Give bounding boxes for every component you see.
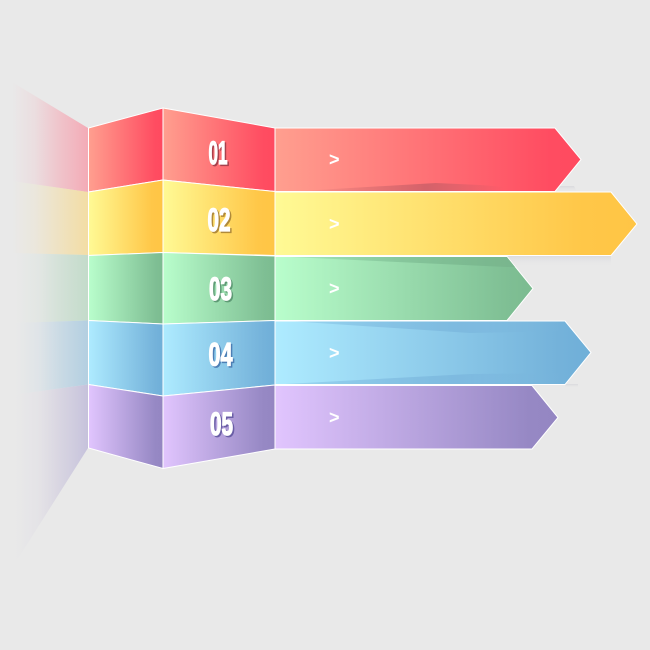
panel: faded left wall [12, 82, 88, 568]
step 05 number [210, 406, 234, 444]
left fold panel 01 [88, 108, 163, 192]
left fold panel 05 [88, 384, 163, 468]
right fold panel 03 [163, 252, 275, 324]
left fold panel 02 [88, 180, 163, 256]
arrow 01 [275, 128, 581, 192]
step 05 chevron: > [329, 408, 340, 428]
step 02 chevron: > [329, 214, 340, 234]
arrow shadows [507, 186, 611, 388]
step 02: yellow row [88, 180, 637, 256]
right fold panel 04 [163, 320, 275, 396]
step 03 number: 03 [209, 271, 232, 307]
step 01 arrow shadow wedge [300, 183, 555, 191]
step 03 number: 03 [210, 272, 234, 308]
step 04 number [208, 336, 234, 374]
left fold panel 03 [88, 252, 163, 324]
step 02 number: 02 [208, 202, 230, 238]
step 03: green row [88, 252, 533, 324]
right fold panel 01 [163, 108, 275, 192]
step 03 number [209, 271, 234, 308]
step 01 number: 01 [210, 136, 229, 172]
step 05 number: 05 [210, 406, 233, 442]
step 03 shadow wedge [290, 257, 515, 267]
step 01 chevron: > [329, 150, 340, 170]
step 01: red row [88, 108, 581, 192]
arrow 02 [275, 192, 637, 256]
step 03 chevron: > [329, 278, 340, 298]
step 04 number: 04 [208, 336, 233, 372]
step 04 chevron: > [329, 343, 340, 363]
step 05: purple row [88, 384, 558, 468]
left fold panel 04 [88, 320, 163, 396]
step 04 shadow wedges [285, 322, 572, 384]
step 04: blue row [88, 320, 591, 396]
arrow 03 [275, 256, 533, 320]
right fold panel 02 [163, 180, 275, 256]
right fold panel 05 [163, 385, 275, 468]
step 02 number: 02 [209, 204, 232, 240]
step 01 number [208, 135, 229, 172]
step 05 number: 05 [212, 408, 234, 444]
step 01 number: 01 [208, 135, 228, 171]
step 02 number [208, 202, 232, 240]
arrow 05 [275, 386, 558, 449]
step 04 number: 04 [210, 338, 234, 374]
arrow 04 [275, 321, 591, 384]
